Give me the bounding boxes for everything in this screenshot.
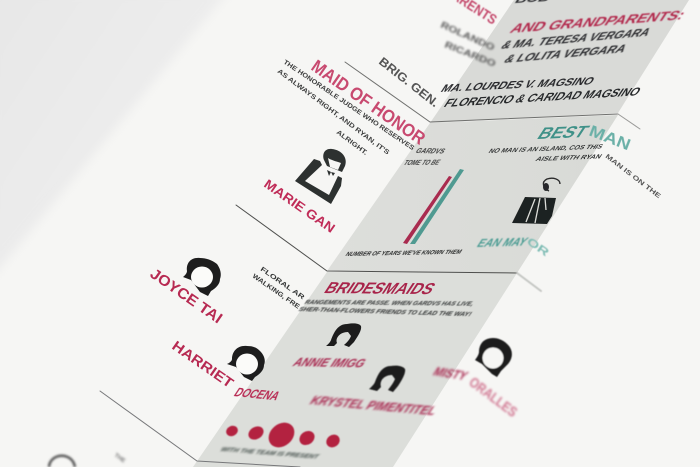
text: brig. gen. Florencio and Caridad Magsino: BRIG. GEN. xyxy=(376,54,442,110)
gray panel: parents and grandparents xyxy=(430,0,689,123)
heading: best man: BEST xyxy=(533,123,592,143)
text: best man description xyxy=(487,143,663,201)
heading: best man xyxy=(533,123,633,154)
name: Krystel Pimentitel: KRYSTEL PIMENTITEL xyxy=(307,393,440,418)
icon: maid of honor figure xyxy=(295,149,346,204)
text: best man description: NO MAN IS AN ISLAND, COS THIS xyxy=(487,143,605,155)
gray panel: best man and years xyxy=(327,115,618,273)
name: Harriet Docena: DOCENA xyxy=(231,385,283,404)
heading: parents and grandparents xyxy=(449,0,688,36)
fold lines xyxy=(100,62,640,467)
icon: Krystel hair xyxy=(369,366,405,392)
text: best man description: AISLE WITH RYAN xyxy=(534,153,604,163)
text: bridesmaids description: FLORAL AR xyxy=(259,266,306,302)
text: maid of honor description xyxy=(276,59,447,167)
icon: Joyce Tai hair and face xyxy=(183,258,221,296)
name: Ean Mayor: OR xyxy=(524,236,551,259)
text: bridesmaids description: SHER-THAN-FLOWERS FRIENDS TO LEAD THE WAY! xyxy=(297,307,473,318)
name: Joyce Tai: JOYCE TAI xyxy=(147,265,225,327)
text: maid of honor description: THE HONORABLE JUDGE WHO RESERVES xyxy=(282,59,416,152)
partial icon and text: bottom edge xyxy=(49,453,126,467)
text: maid of honor description: ALRIGHT. xyxy=(335,129,369,157)
text: grandparent names: & LOLITA VERGARA xyxy=(501,42,630,65)
icon: Harriet Docena hair and face xyxy=(227,346,265,381)
name: Annie Imigg: ANNIE IMIGG xyxy=(290,355,369,371)
text: maid of honor description: TOME TO BE xyxy=(402,159,442,167)
name: Harriet Docena xyxy=(169,337,283,404)
bar chart: number of years known xyxy=(403,169,464,244)
text: best man description: MAN IS ON THE xyxy=(604,153,663,201)
name: Ean Mayor: EAN MAY xyxy=(474,235,532,249)
partial icon and text: bottom edge: THE xyxy=(113,453,126,465)
text: brig. gen. Florencio and Caridad Magsino: FLORENCIO & CARIDAD MAGSINO xyxy=(441,85,644,109)
label: Marie Gan: MARIE GAN xyxy=(261,176,338,236)
icon: best man figure xyxy=(512,178,560,224)
text: maid of honor description: GARDVS xyxy=(414,147,447,155)
heading: parents and grandparents: AND GRANDPARENTS: xyxy=(507,8,688,36)
name: Misty Oralles: ORALLES xyxy=(466,374,521,420)
name: Misty Oralles: MISTY xyxy=(430,364,472,383)
text: grandparent names: & MA. TERESA VERGARA xyxy=(498,26,654,51)
icon: Misty hair and face xyxy=(475,338,512,377)
heading: best man: MAN xyxy=(587,123,633,154)
text: grandparent names: MA. LOURDES V. MAGSINO xyxy=(438,74,598,94)
text: bridesmaids description: WALKING, FRE xyxy=(251,273,301,311)
chart: proportional red dots xyxy=(224,418,342,452)
icon: Annie hair xyxy=(326,323,361,347)
text: brig. gen. Florencio and Caridad Magsino xyxy=(376,54,644,110)
text: grandparent names: RICARDO xyxy=(443,40,497,69)
caption: number of years: NUMBER OF YEARS WE'VE KNOWN THEM xyxy=(344,250,463,258)
name: Misty Oralles xyxy=(430,364,521,420)
name: Harriet Docena: HARRIET xyxy=(169,337,237,391)
text: grandparent names: ROLANDO xyxy=(439,20,496,53)
text: maid of honor description: AS ALWAYS RIGHT, AND RYAN, IT'S xyxy=(276,68,391,157)
caption: dots: WITH THE TEAM IS PRESENT xyxy=(219,447,320,460)
text: grandparent names xyxy=(438,20,654,94)
name: Ean Mayor xyxy=(474,235,551,259)
heading: bridesmaids: BRIDESMAIDS xyxy=(320,280,439,298)
textured tabletop background xyxy=(0,0,230,280)
text: bridesmaids description xyxy=(251,266,475,318)
text: bridesmaids description: RANGEMENTS ARE PASSE. WHEN GARDVS HAS LIVE, xyxy=(303,300,475,307)
gray panel: bridesmaids xyxy=(193,272,517,467)
heading: maid of honor: MAID OF HONOR xyxy=(308,56,429,149)
